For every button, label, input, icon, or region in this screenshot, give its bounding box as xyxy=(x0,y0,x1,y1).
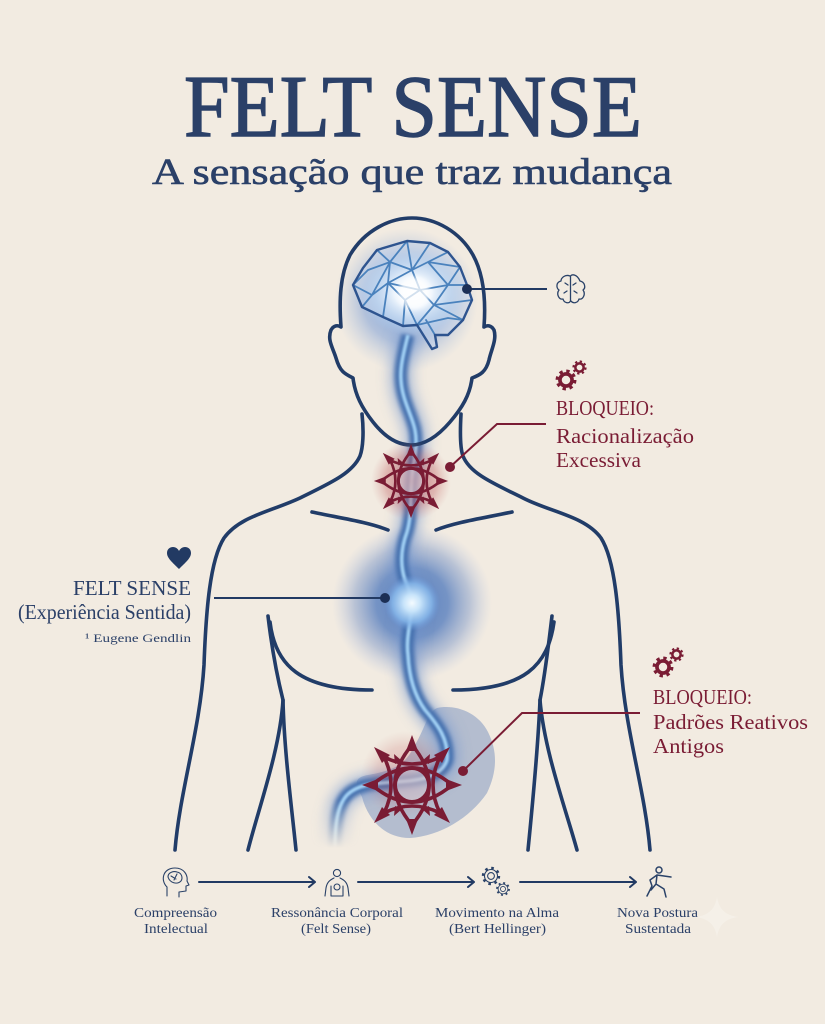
step label 3: Movimento na Alma xyxy=(435,905,559,920)
low-poly brain xyxy=(353,241,472,349)
label: felt sense: FELT SENSE xyxy=(73,576,191,600)
process strip xyxy=(134,867,698,936)
step label 4: Nova Postura xyxy=(617,905,698,920)
body figure xyxy=(175,218,650,850)
label: bloqueio 2: BLOQUEIO: xyxy=(653,685,752,709)
step label 1: Intelectual xyxy=(144,921,208,936)
step label 2 xyxy=(271,905,403,936)
icon: brain xyxy=(557,275,585,303)
body outline xyxy=(175,218,650,850)
thorn mandala: gut xyxy=(362,735,462,835)
step icon: body xyxy=(325,869,349,896)
step icon: head with brain xyxy=(163,868,189,897)
icon: small gears lower xyxy=(654,648,682,676)
step label 3: (Bert Hellinger) xyxy=(449,921,546,936)
label: felt sense: ¹ Eugene Gendlin xyxy=(85,631,191,645)
label: bloqueio 2: Antigos xyxy=(653,734,724,758)
step label 4: Sustentada xyxy=(625,921,691,936)
thorn mandala: throat xyxy=(374,444,448,518)
arrow 3 xyxy=(520,877,636,887)
label: bloqueio 1 xyxy=(556,396,694,472)
step label 1 xyxy=(134,905,217,936)
title: FELT SENSE xyxy=(184,59,642,156)
energy channel xyxy=(335,335,447,850)
icon: sparkle xyxy=(696,897,738,937)
step icon: walking figure xyxy=(647,867,671,897)
step label 4 xyxy=(617,905,698,936)
step label 2: (Felt Sense) xyxy=(301,921,371,936)
label: felt sense xyxy=(18,576,191,645)
connector: bloqueio 2 xyxy=(458,713,640,776)
step icon: gears xyxy=(483,868,509,895)
label: bloqueio 2 xyxy=(653,685,808,758)
step label 3 xyxy=(435,905,559,936)
label: bloqueio 1: Excessiva xyxy=(556,448,642,472)
connector: bloqueio 1 xyxy=(445,424,546,472)
label: bloqueio 1: BLOQUEIO: xyxy=(556,396,654,420)
stomach xyxy=(357,707,495,838)
stomach block glow xyxy=(361,731,449,819)
subtitle: A sensação que traz mudança xyxy=(152,152,672,193)
head glow xyxy=(334,228,478,372)
label: bloqueio 2: Padrões Reativos xyxy=(653,710,808,734)
arrow 1 xyxy=(199,877,315,887)
icon: heart xyxy=(167,547,191,569)
chest glow xyxy=(332,525,492,681)
brain connector xyxy=(462,284,547,294)
label: felt sense: (Experiência Sentida) xyxy=(18,600,191,624)
icon: small gears top xyxy=(557,362,586,389)
arrow 2 xyxy=(358,877,474,887)
step label 2: Ressonância Corporal xyxy=(271,905,403,920)
throat block glow xyxy=(371,441,451,521)
chest core glow xyxy=(384,575,440,631)
label: bloqueio 1: Racionalização xyxy=(556,424,694,448)
connector: felt sense xyxy=(214,593,390,603)
step label 1: Compreensão xyxy=(134,905,217,920)
